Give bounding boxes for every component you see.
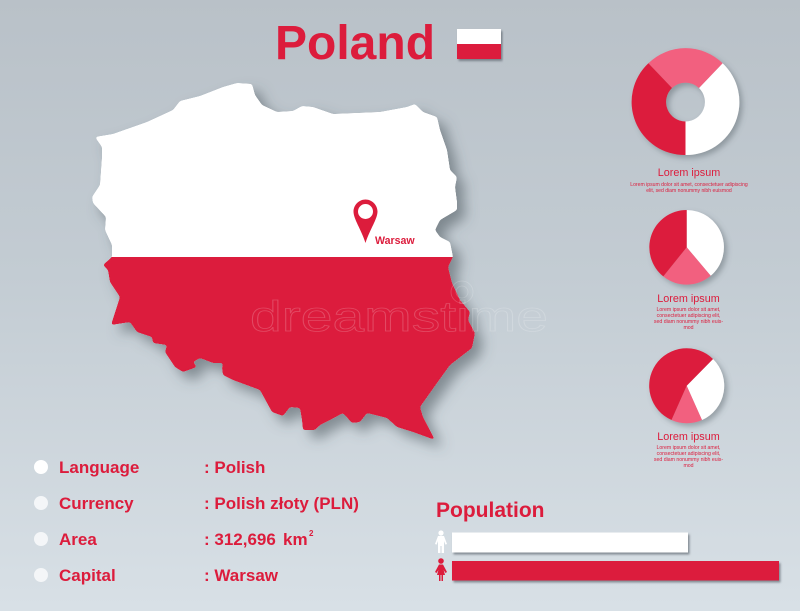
donut caption: Lorem ipsum bbox=[658, 167, 720, 179]
pie chart 3 bbox=[649, 348, 724, 423]
map label: Warsaw: Warsaw bbox=[375, 235, 415, 247]
donut caption: elit, sed diam nonummy nibh euismod bbox=[646, 188, 732, 194]
donut caption: Lorem ipsum dolor sit amet, consectetuer adipiscing bbox=[630, 182, 748, 188]
fact: area: km bbox=[283, 530, 308, 549]
fact: language: : Polish bbox=[204, 458, 265, 477]
icon: female figure bbox=[435, 558, 447, 581]
pie 2 caption bbox=[654, 293, 723, 331]
title: Poland bbox=[275, 17, 435, 70]
pie 2 caption: consectetuer adipiscing elit, bbox=[657, 313, 720, 319]
fact: currency: : Polish złoty (PLN) bbox=[204, 494, 359, 513]
fact: area: : 312,696 bbox=[204, 530, 276, 549]
fact: area bbox=[34, 529, 314, 549]
fact: currency bbox=[34, 494, 359, 513]
pie 3 caption: Lorem ipsum bbox=[657, 431, 720, 443]
pie 2 caption: Lorem ipsum dolor sit amet, bbox=[656, 307, 721, 313]
pie 3 caption bbox=[654, 431, 723, 469]
pie 2 caption: mod bbox=[683, 325, 694, 331]
pie 3 caption: consectetuer adipiscing elit, bbox=[657, 451, 720, 457]
pie chart 2 bbox=[649, 210, 724, 285]
watermark: dreamstime bbox=[250, 293, 548, 341]
facts list bbox=[34, 458, 359, 585]
icon: male figure bbox=[435, 530, 447, 553]
fact: currency: Currency bbox=[59, 494, 134, 513]
icon: Polish flag bbox=[457, 29, 501, 59]
fact: language: Language bbox=[59, 458, 139, 477]
pie 2 caption: Lorem ipsum bbox=[657, 293, 720, 305]
donut chart bbox=[632, 48, 739, 155]
fact: area: 2 bbox=[309, 529, 314, 538]
watermark bbox=[250, 281, 548, 341]
fact: capital: : Warsaw bbox=[204, 566, 279, 585]
pie 3 caption: Lorem ipsum dolor sit amet, bbox=[656, 445, 721, 451]
pie 3 caption: mod bbox=[683, 463, 694, 469]
bar: male population bbox=[452, 532, 688, 552]
map of Poland bbox=[92, 83, 475, 440]
icon: location pin bbox=[354, 200, 378, 243]
pie 3 caption: sed diam nonummy nibh euis- bbox=[654, 457, 723, 463]
fact: capital bbox=[34, 566, 279, 585]
fact: capital: Capital bbox=[59, 566, 116, 585]
fact: area: Area bbox=[59, 530, 97, 549]
pie 2 caption: sed diam nonummy nibh euis- bbox=[654, 319, 723, 325]
donut caption bbox=[630, 167, 748, 194]
population heading: Population bbox=[436, 499, 544, 522]
bar: female population bbox=[452, 561, 779, 580]
fact: language bbox=[34, 458, 265, 477]
